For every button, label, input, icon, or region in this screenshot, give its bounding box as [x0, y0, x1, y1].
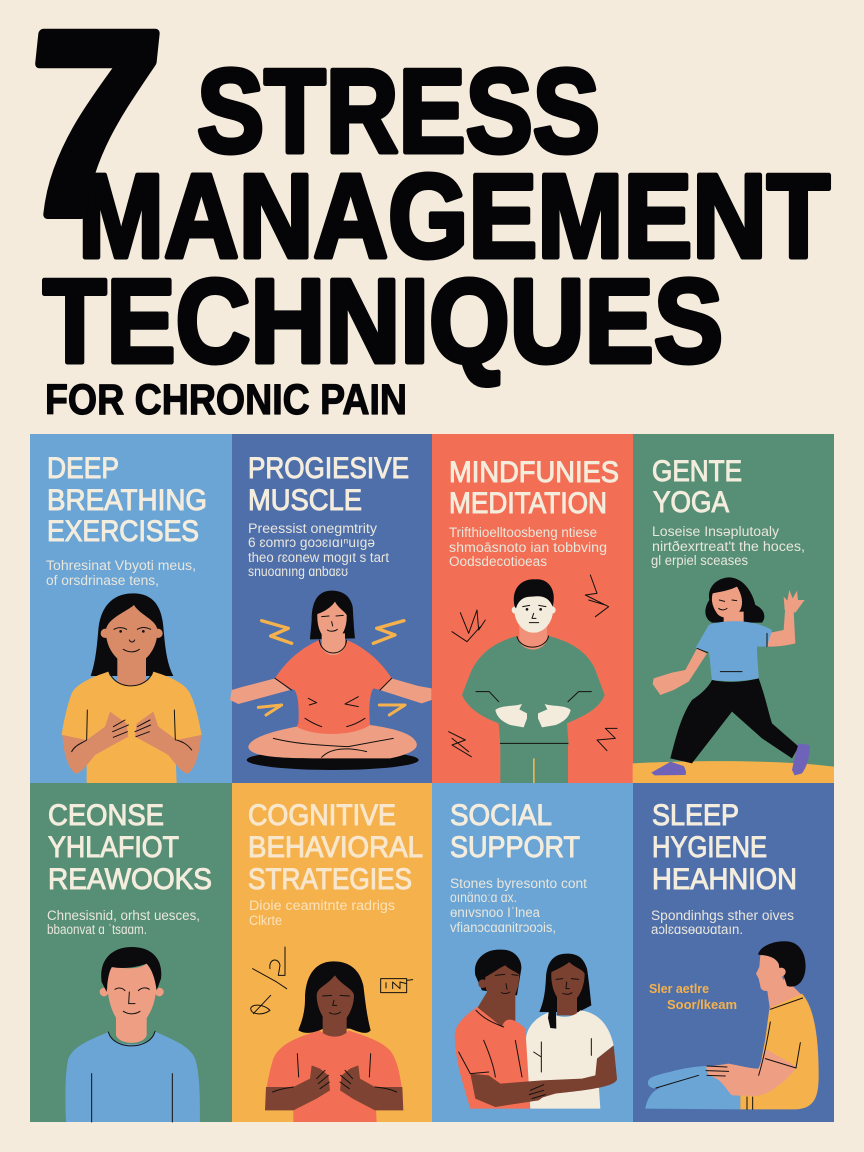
body text: [651, 908, 794, 937]
heading: PROGIESIVE: [248, 452, 409, 485]
yellow caption: Soor/lkeam: [667, 998, 737, 1012]
body text: [651, 524, 805, 568]
body text: Stones byresonto cont: [450, 876, 587, 891]
heading: MEDITATION: [449, 487, 607, 520]
body text: [449, 525, 607, 569]
illustration: woman in yoga lunge: [633, 577, 834, 783]
body text: Loseise Insəplutoaly: [652, 524, 779, 539]
body text: Chnesisnid, orhst uesces,: [47, 908, 200, 923]
illustration: smiling man in blue sweater: [65, 947, 200, 1122]
heading: SLEEP: [652, 799, 739, 832]
heading: SUPPORT: [450, 831, 580, 864]
body text: [249, 898, 395, 928]
illustration: seated man in profile: [645, 941, 819, 1109]
heading: REAWOOKS: [48, 863, 212, 896]
heading: [248, 799, 423, 896]
heading: [449, 456, 619, 520]
heading: [248, 452, 409, 517]
subtitle: FOR CHRONIC PAIN: [45, 376, 407, 424]
heading: [47, 452, 207, 548]
heading: DEEP: [47, 452, 119, 485]
panel: social support: [432, 783, 633, 1122]
body text: nirtðexrtreat't the hoces,: [652, 539, 805, 554]
heading: HYGIENE: [652, 831, 767, 864]
heading: YHLAFIOT: [48, 831, 179, 864]
yellow caption: Sler aetlre: [649, 982, 709, 996]
body text: ɵnıvsnoo Iˈlnea: [450, 905, 540, 920]
body text: Preessist onegmtrity: [248, 521, 377, 536]
illustration: woman with doodles: [251, 947, 413, 1122]
heading: MINDFUNIES: [449, 456, 619, 489]
body text: oınɑ̈noːɑ ɑx.: [450, 890, 517, 905]
title: TECHNIQUES: [43, 255, 723, 388]
heading: HEAHNION: [652, 863, 797, 896]
body text: [46, 558, 196, 588]
heading: STRATEGIES: [248, 863, 412, 896]
body text: [47, 908, 200, 937]
body text: vfianɔcɑɑnitrɔoɔis,: [450, 920, 556, 935]
illustration: man with hands on stomach: [449, 575, 617, 783]
body text: [450, 876, 587, 935]
illustration: woman with hands on chest: [62, 593, 202, 783]
panel: cognitive behavioral strategies: [232, 783, 432, 1122]
heading: BEHAVIORAL: [248, 831, 423, 864]
body text: Clkrte: [249, 913, 282, 928]
illustration: two people supporting each other: [455, 950, 617, 1109]
body text: Tohresinat Vbyoti meus,: [46, 558, 196, 573]
heading: [652, 799, 797, 896]
body text: theo ɾɛonew moɡıt s taɾt: [248, 550, 389, 565]
panel: progressive muscle: [230, 434, 432, 783]
panel: deep breathing exercises: [30, 434, 232, 783]
body text: aɔlɛɑsɵɑʊɑtaın.: [651, 922, 743, 937]
heading: CEONSE: [48, 799, 164, 832]
body text: 6 ɛomrɔ ɡoɔɛıɑıⁿuıɡə: [248, 535, 375, 550]
body text: [248, 521, 389, 579]
title: STRESS: [197, 45, 600, 178]
body text: Spondinhgs sther oives: [651, 908, 794, 923]
illustration: woman seated cross-legged: [230, 591, 432, 770]
heading: [450, 799, 580, 864]
heading: [48, 799, 212, 896]
body text: Dioie ceamitnte radrigs: [249, 898, 395, 913]
body text: Oodsdecotioeas: [449, 554, 547, 569]
heading: YOGA: [653, 486, 729, 519]
heading: [652, 455, 742, 519]
panel: gentle yoga: [633, 434, 834, 783]
heading: EXERCISES: [47, 515, 199, 548]
panel: sleep hygiene: [633, 783, 834, 1122]
title: [8, 0, 830, 388]
panel: ceonse yhlafiot reawooks: [30, 783, 232, 1122]
body text: gl erpiel sceases: [651, 553, 748, 568]
heading: SOCIAL: [450, 799, 552, 832]
heading: COGNITIVE: [248, 799, 396, 832]
heading: BREATHING: [47, 484, 207, 517]
heading: GENTE: [652, 455, 742, 488]
body text: snuoɑnıng ɑnbɑɛʊ: [248, 564, 348, 579]
body text: Trifthioelltoosbeng ntiese: [449, 525, 597, 540]
body text: bbaonvat ɑ ˈtsɑɑm.: [47, 922, 147, 937]
yellow caption: [649, 982, 737, 1012]
heading: MUSCLE: [248, 484, 362, 517]
body text: shmoāsnoto ian tobbving: [449, 540, 607, 555]
panel: mindfulness meditation: [432, 434, 633, 783]
body text: of orsdrinase tens,: [46, 573, 159, 588]
